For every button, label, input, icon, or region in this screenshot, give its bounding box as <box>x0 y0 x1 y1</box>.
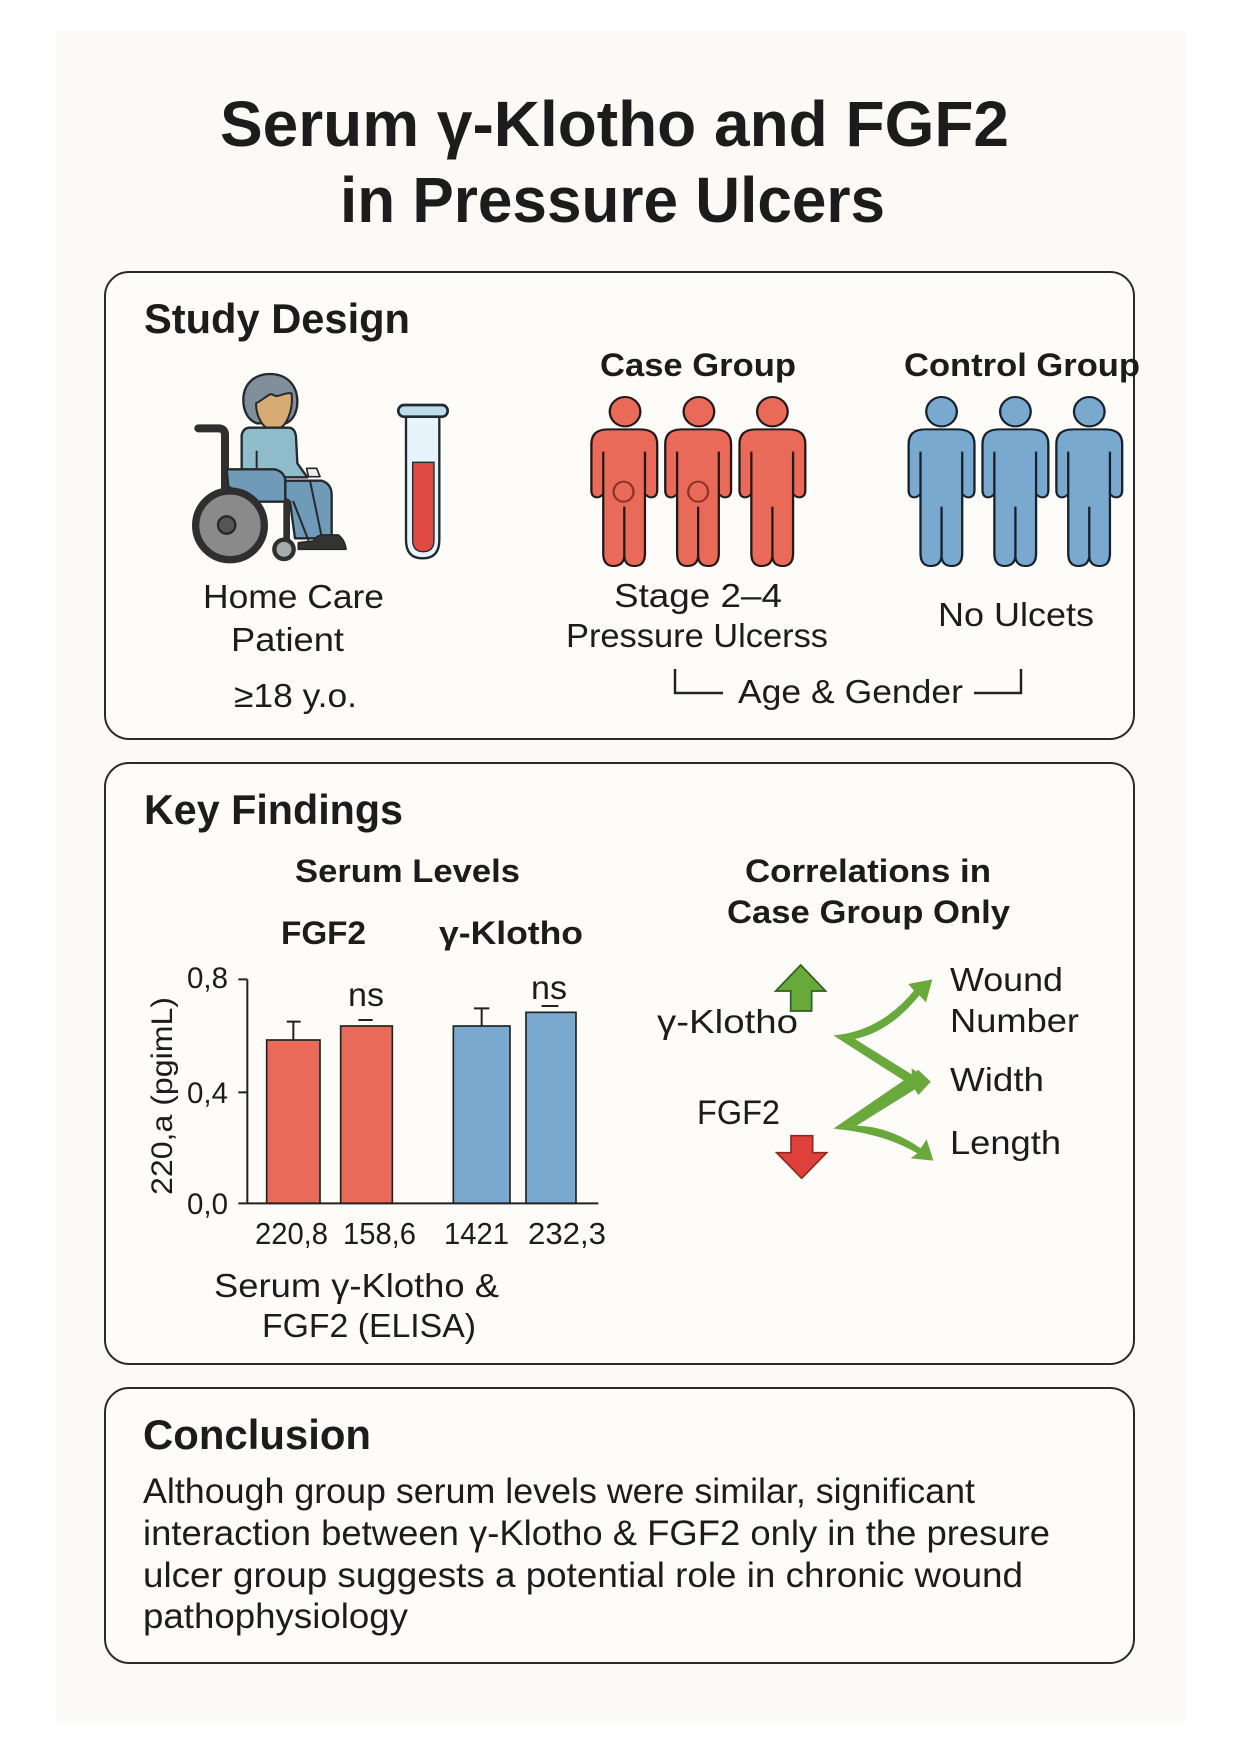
bar chart: serum levels: 0,8 <box>187 962 228 995</box>
chart caption: FGF2 (ELISA) <box>262 1307 476 1344</box>
label: fgf2: FGF2 <box>697 1094 780 1132</box>
label: home care patient: Home Care <box>203 578 384 615</box>
label: home care patient: ≥18 y.o. <box>234 677 357 714</box>
panel: study design <box>105 272 1140 739</box>
heading: correlations: Correlations in <box>745 853 991 889</box>
bar chart: serum levels: 1421 <box>444 1216 509 1251</box>
label: stage 2-4 pressure ulcers: Pressure Ulcerss <box>566 617 828 654</box>
bar chart: serum levels: 220,8 <box>255 1216 328 1251</box>
bar chart: serum levels: 158,6 <box>343 1216 416 1251</box>
conclusion text: pathophysiology <box>143 1597 409 1636</box>
label: no ulcers: No Ulcets <box>938 596 1094 633</box>
title: Serum γ-Klotho and FGF2 <box>220 88 1009 160</box>
conclusion text: interaction between γ-Klotho & FGF2 only in the presure <box>143 1514 1050 1553</box>
conclusion text: Although group serum levels were similar, significant <box>143 1472 975 1511</box>
icon: control group figures <box>909 397 1122 566</box>
label: gamma klotho: γ-Klotho <box>657 1003 798 1040</box>
heading: control group: Control Group <box>904 347 1140 383</box>
heading: correlations: Case Group Only <box>727 894 1010 930</box>
label: stage 2-4 pressure ulcers: Stage 2–4 <box>614 577 782 614</box>
outcome labels: Width <box>950 1061 1044 1098</box>
conclusion text: ulcer group suggests a potential role in chronic wound <box>143 1556 1023 1595</box>
icon: blood test tube <box>398 405 448 558</box>
outcome labels <box>950 961 1079 1161</box>
title: in Pressure Ulcers <box>340 164 885 236</box>
icon: patient in wheelchair <box>196 374 346 560</box>
matched on age and gender bracket: Age & Gender <box>738 673 963 710</box>
heading: case group: Case Group <box>600 347 796 383</box>
icon: case group figures <box>591 397 805 566</box>
icon: down arrow <box>777 1136 827 1178</box>
bar chart: serum levels: γ-Klotho <box>439 915 583 951</box>
bar chart: serum levels: FGF2 <box>281 915 366 951</box>
label: home care patient <box>203 578 384 714</box>
bar chart: serum levels: 232,3 <box>528 1216 606 1251</box>
label: home care patient: Patient <box>231 621 344 658</box>
conclusion text <box>143 1472 1050 1636</box>
chart caption: Serum γ-Klotho & <box>214 1267 499 1304</box>
bar chart: serum levels: 0,0 <box>187 1188 228 1221</box>
label: stage 2-4 pressure ulcers <box>566 577 828 654</box>
title <box>220 88 1009 236</box>
heading: serum levels: Serum Levels <box>295 853 520 889</box>
bar chart: serum levels <box>146 915 606 1251</box>
outcome labels: Number <box>950 1002 1079 1039</box>
heading: correlations <box>727 853 1010 930</box>
panel: key findings <box>105 763 1134 1364</box>
heading: conclusion: Conclusion <box>143 1411 371 1458</box>
panel: conclusion <box>105 1388 1134 1663</box>
heading: study design: Study Design <box>144 295 410 342</box>
matched on age and gender bracket <box>675 669 1021 710</box>
bar chart: serum levels: ns <box>348 976 384 1013</box>
heading: key findings: Key Findings <box>144 786 403 833</box>
correlation arrows <box>833 979 933 1161</box>
icon: up arrow <box>776 965 826 1011</box>
outcome labels: Length <box>950 1124 1061 1161</box>
chart caption <box>214 1267 499 1344</box>
bar chart: serum levels: ns <box>531 969 567 1006</box>
bar chart: serum levels: 220,a (pgimL) <box>146 997 179 1195</box>
bar chart: serum levels: 0,4 <box>187 1077 228 1110</box>
outcome labels: Wound <box>950 961 1063 998</box>
